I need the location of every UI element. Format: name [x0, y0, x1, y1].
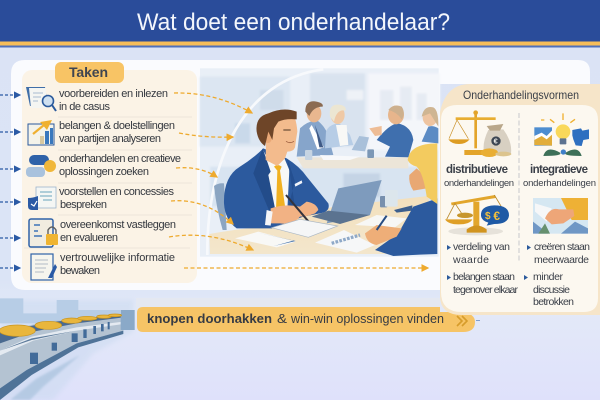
task texts: voorstellen en concessies — [59, 186, 174, 198]
task texts: en evalueren — [60, 232, 118, 244]
man — [224, 110, 329, 228]
icon: idea bulb and puzzle — [534, 113, 589, 156]
bullets: belangen staan — [453, 271, 515, 283]
title banner: Wat doet een onderhandelaar? — [137, 9, 450, 36]
task texts: overeenkomst vastleggen — [60, 219, 176, 231]
banner: conclusion — [137, 307, 475, 332]
icon: chat bubbles — [26, 155, 56, 177]
labels: types: distributieve — [446, 164, 508, 176]
panel: taken — [22, 62, 197, 283]
bullets: minder — [533, 271, 564, 283]
icon: clipboard lock — [29, 219, 58, 247]
papers on table — [272, 219, 338, 237]
icon: scale and money bag: € — [494, 137, 498, 146]
woman — [365, 143, 437, 256]
task texts: vertrouwelijke informatie — [60, 252, 175, 264]
bullets: creëren staan — [534, 241, 590, 253]
bullets: discussie — [533, 284, 570, 296]
task texts: voorbereiden en inlezen — [59, 88, 168, 100]
task texts: bewaken — [60, 265, 100, 277]
arrows: tasks to scene — [169, 93, 428, 268]
task texts: onderhandelen en creatieve — [59, 153, 181, 165]
labels: types: onderhandelingen — [444, 178, 514, 189]
bullets: waarde — [452, 254, 489, 266]
heading: taken — [55, 62, 124, 83]
bullets — [452, 241, 590, 308]
lower wall — [210, 167, 437, 207]
icon: handshake — [533, 198, 588, 234]
title banner — [0, 0, 600, 48]
icon: scale and money bag — [448, 110, 511, 157]
icon: gold scale and currency: $ — [485, 211, 491, 222]
band behind pill — [136, 298, 440, 307]
white backing panel — [11, 60, 590, 290]
labels: types: integratieve — [530, 164, 588, 176]
foreground table — [209, 196, 433, 254]
icon: document pen — [31, 254, 57, 280]
labels: types — [444, 164, 596, 189]
rear table — [297, 157, 408, 168]
bullets: betrokken — [533, 296, 574, 308]
icon: document check — [28, 187, 56, 210]
icon: chart — [28, 120, 54, 145]
bullets: meerwaarde — [534, 254, 589, 266]
icon: gold scale and currency — [445, 195, 509, 235]
task texts: oplossingen zoeken — [59, 166, 149, 178]
illustration: negotiation scene — [200, 68, 440, 257]
heading: Onderhandelingsvormen — [463, 88, 579, 102]
chair — [214, 183, 227, 230]
task texts: bespreken — [60, 199, 107, 211]
banner: conclusion: win-win oplossingen vinden — [290, 312, 444, 326]
background people — [297, 101, 438, 157]
window — [368, 73, 440, 150]
heading: taken: Taken — [69, 64, 108, 80]
banner: conclusion: knopen doorhakken — [147, 311, 272, 326]
arrows: left inputs — [0, 95, 20, 268]
panel: onderhandelingsvormen — [440, 84, 600, 315]
bullets: tegenover elkaar — [453, 284, 518, 296]
icon: gold scale and currency: € — [493, 209, 500, 223]
tail dash after banner — [476, 320, 480, 322]
task texts: belangen & doelstellingen — [59, 120, 175, 132]
task texts — [59, 88, 181, 277]
task texts: van partijen analyseren — [59, 133, 161, 145]
laptop — [327, 180, 382, 223]
conveyor with coins — [0, 298, 135, 400]
bullet arrows — [447, 245, 531, 280]
arc — [207, 69, 323, 255]
labels: types: onderhandelingen — [523, 178, 596, 189]
bullets: verdeling van — [453, 241, 510, 253]
icon: document magnifier — [26, 87, 56, 111]
task texts: in de casus — [59, 101, 110, 113]
banner: conclusion: & — [277, 311, 287, 326]
